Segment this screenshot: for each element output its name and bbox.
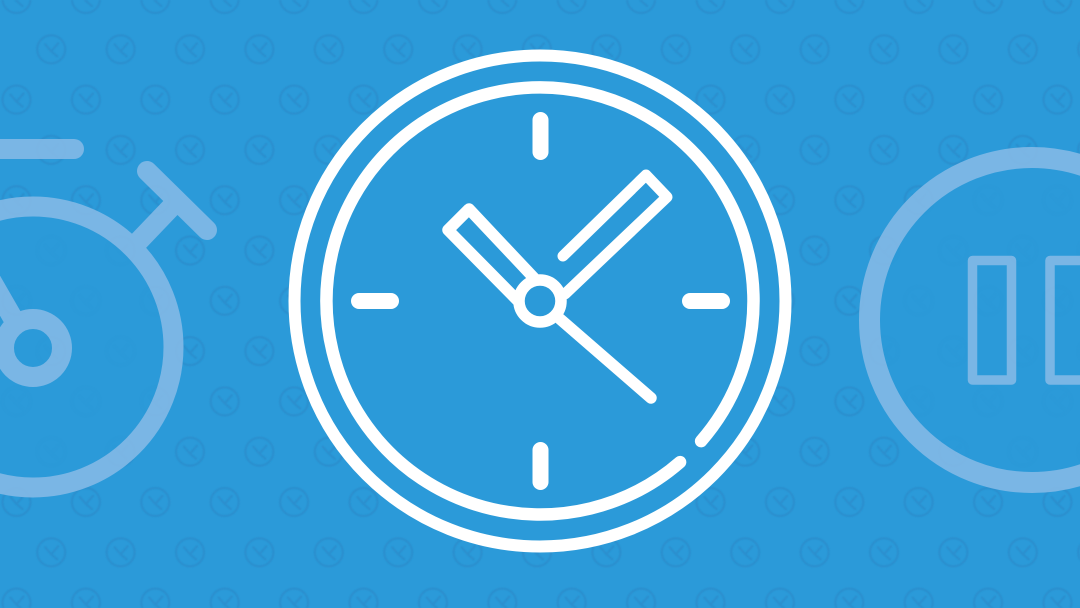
minute hand xyxy=(563,175,667,294)
icon: pause button xyxy=(870,158,1080,482)
hour hand xyxy=(448,209,534,301)
inner ring with gap xyxy=(326,87,753,514)
icon: main clock xyxy=(294,56,786,546)
clock face xyxy=(294,56,786,546)
left pause bar xyxy=(972,260,1012,380)
hub xyxy=(519,280,561,322)
right pause bar xyxy=(1050,260,1080,380)
icon: stopwatch xyxy=(0,149,207,488)
hour ticks xyxy=(359,120,722,482)
second hand xyxy=(560,319,651,398)
